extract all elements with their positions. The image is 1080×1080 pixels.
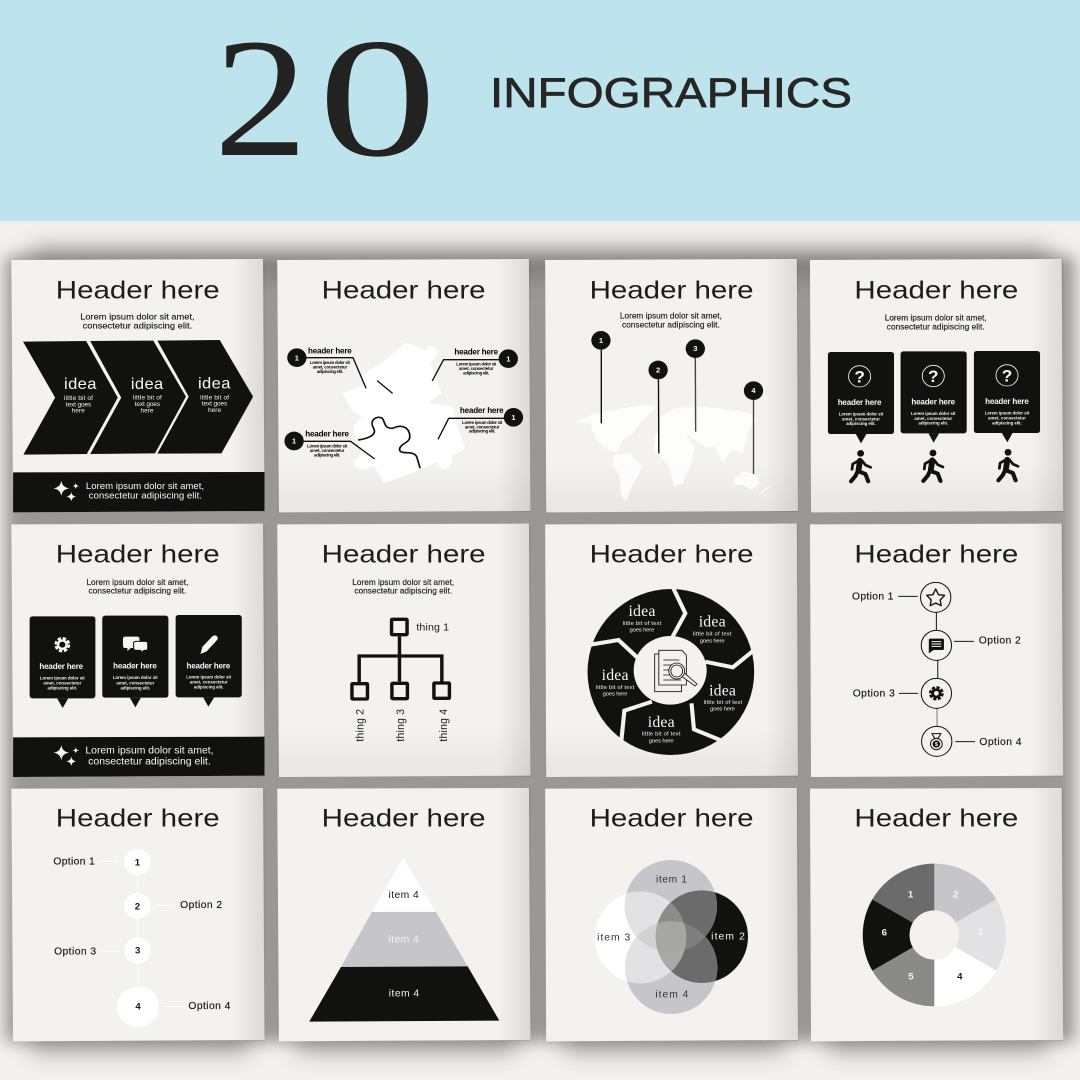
pin 3 (686, 339, 705, 432)
option labels: Option 2 (180, 900, 222, 911)
panel: question boxes (810, 259, 1063, 512)
box 1: header here (838, 398, 882, 407)
heading: Header here (590, 277, 754, 304)
box: chat (102, 616, 168, 707)
box: chat: header here (113, 662, 157, 671)
heading: Header here (854, 541, 1018, 568)
pin 2 (648, 361, 668, 453)
panel: world map pins (545, 259, 798, 512)
tree labels: thing 3 (395, 709, 407, 742)
callout top right: adipiscing elit. (463, 370, 489, 375)
option labels (53, 856, 231, 1012)
donut labels: 6 (882, 927, 887, 938)
tree diagram (352, 619, 449, 699)
donut labels (882, 890, 983, 982)
top banner (0, 0, 1080, 221)
node 4 (117, 986, 159, 1027)
icon: sparkles (53, 745, 79, 766)
title: infographics: INFOGRAPHICS (490, 69, 852, 116)
footer text: Lorem ipsum dolor sit amet, (85, 746, 214, 757)
subtitle: consectetur adipiscing elit. (354, 586, 452, 596)
wheel labels: idea (699, 614, 726, 631)
heading: Header here (854, 277, 1018, 304)
footer text: consectetur adipiscing elit. (88, 757, 211, 768)
footer bar (13, 737, 264, 777)
footer text: Lorem ipsum dolor sit amet, (86, 481, 204, 491)
callout bottom left: Lorem ipsum dolor sit (307, 444, 348, 449)
subtitle: Lorem ipsum dolor sit amet, (352, 577, 454, 587)
callout bottom left: header here (305, 430, 350, 439)
icon: document search (655, 650, 697, 692)
subtitle (885, 313, 987, 331)
wheel labels: little bit of text (623, 621, 662, 627)
option labels: Option 4 (979, 737, 1022, 748)
subtitle: consectetur adipiscing elit. (622, 319, 720, 329)
pyramid bottom tier (309, 966, 499, 1022)
heading: Header here (590, 541, 754, 568)
box 2: amet, consectetur (914, 416, 953, 421)
callout top left: amet, consectetur (313, 365, 347, 370)
subtitle: consectetur adipiscing elit. (83, 320, 192, 330)
puzzle seam (358, 417, 420, 468)
box: settings (30, 616, 95, 708)
donut segments (863, 864, 1006, 1006)
title: 20: 0 (318, 4, 437, 192)
heading: Header here (56, 805, 220, 833)
callout top left: header here (308, 346, 352, 355)
chevron labels: idea (64, 375, 97, 393)
subtitle (352, 577, 454, 596)
wheel labels: goes here (649, 738, 674, 744)
pin 1 (591, 331, 611, 423)
title: 20 (214, 4, 437, 192)
footer text: consectetur adipiscing elit. (89, 491, 202, 501)
wheel labels: little bit of text (642, 732, 681, 738)
heading: Header here (322, 541, 486, 568)
node: chat (921, 630, 952, 660)
heading: Header here (854, 805, 1018, 833)
option labels: Option 2 (979, 635, 1021, 646)
wheel labels: goes here (710, 707, 735, 713)
subtitle: Lorem ipsum dolor sit amet, (885, 313, 987, 323)
subtitle: Lorem ipsum dolor sit amet, (80, 311, 195, 321)
box: pen: header here (186, 661, 231, 670)
subtitle: Lorem ipsum dolor sit amet, (620, 311, 722, 321)
chevron labels (64, 375, 231, 415)
box 2: adipiscing elit. (918, 421, 948, 426)
callout top left: 1 (295, 353, 299, 362)
panel: icon boxes (11, 524, 264, 777)
icon: walker 3 (998, 449, 1018, 480)
node: money bag: $ (935, 742, 938, 748)
venn labels: item 3 (597, 932, 631, 943)
wheel labels: goes here (630, 628, 654, 634)
box 2: Lorem ipsum dolor sit (911, 411, 956, 416)
box: settings: adipiscing elit. (48, 686, 77, 691)
subtitle: consectetur adipiscing elit. (887, 321, 985, 331)
callout bottom right: Lorem ipsum dolor sit (462, 420, 503, 425)
chevron labels: text goes (66, 401, 91, 408)
box 3: amet, consectetur (988, 415, 1026, 420)
venn circles (595, 860, 748, 1014)
chevron labels: idea (131, 375, 164, 393)
box 1 (828, 352, 894, 443)
panel: pyramid (277, 788, 530, 1041)
callout bottom left: 1 (292, 437, 296, 446)
callout top left (287, 346, 393, 393)
donut labels: 4 (957, 971, 963, 982)
heading: Header here (56, 541, 220, 568)
soft outer shadow bands (30, 246, 1050, 1053)
box: settings: header here (39, 662, 84, 671)
panel: numbered timeline (11, 788, 264, 1041)
pyramid middle tier (341, 912, 468, 967)
callout bottom right: 1 (511, 413, 516, 422)
wheel gaps (588, 587, 756, 742)
venn labels: item 2 (711, 932, 745, 943)
box: pen: Lorem ipsum dolor sit (186, 675, 232, 680)
node 2 (124, 893, 151, 919)
box 1: amet, consectetur (842, 416, 880, 421)
chevron labels: here (141, 407, 154, 414)
callout top right: header here (454, 348, 499, 357)
wheel labels: little bit of text (596, 685, 635, 691)
box: settings: amet, consectetur (43, 681, 82, 686)
panel: chevron process (11, 259, 264, 512)
box 1: Lorem ipsum dolor sit (839, 411, 884, 416)
callout top left: adipiscing elit. (317, 369, 343, 374)
callout bottom right: adipiscing elit. (469, 429, 495, 434)
box: pen: adipiscing elit. (194, 685, 224, 690)
title: 20: 2 (214, 4, 307, 192)
box 2 (901, 351, 967, 443)
connectors (898, 596, 975, 742)
callout top right: amet, consectetur (459, 366, 494, 371)
panel: cycle wheel (545, 524, 798, 777)
box 3: header here (985, 397, 1029, 406)
callout bottom right: header here (460, 406, 504, 415)
wheel centre (634, 636, 707, 705)
callout bottom left: amet, consectetur (310, 448, 345, 453)
option labels: Option 1 (53, 856, 95, 867)
callout bottom left (284, 430, 375, 459)
panel: hierarchy (277, 524, 530, 777)
tree labels (354, 621, 450, 742)
chevron labels: idea (198, 375, 231, 392)
option labels: Option 3 (853, 689, 895, 700)
node 1 (124, 849, 151, 875)
node 2: 2 (135, 901, 140, 912)
puzzle pieces (343, 343, 466, 483)
donut labels: 5 (908, 971, 914, 982)
subtitle (620, 311, 722, 329)
pin 4: 4 (751, 386, 756, 395)
pyramid top tier (372, 858, 436, 912)
box 3: adipiscing elit. (992, 420, 1022, 425)
subtitle (80, 311, 195, 330)
chevron labels: text goes (135, 401, 160, 408)
box 3: Lorem ipsum dolor sit (985, 411, 1030, 416)
pyramid bottom tier: item 4 (389, 989, 419, 1000)
tree labels: thing 2 (354, 709, 366, 742)
panel: puzzle (277, 259, 530, 512)
pin 1: 1 (599, 336, 603, 345)
node: star (921, 582, 951, 612)
wheel labels: idea (602, 667, 629, 684)
node: money bag (922, 726, 952, 756)
node 3 (124, 938, 151, 964)
pyramid top tier: item 4 (388, 890, 419, 901)
node: gear (921, 678, 952, 708)
option labels: Option 3 (54, 946, 96, 957)
chevron labels: little bit of (200, 394, 229, 401)
box 1: ? (854, 368, 865, 386)
donut labels: 1 (908, 890, 913, 901)
subtitle: Lorem ipsum dolor sit amet, (86, 577, 188, 587)
panel: donut chart (810, 788, 1063, 1041)
node 3: 3 (135, 946, 140, 957)
icon: walker 2 (923, 450, 943, 481)
wheel labels: goes here (700, 638, 725, 644)
box 2: header here (911, 398, 956, 407)
box: pen (176, 615, 242, 707)
box: chat: amet, consectetur (116, 680, 155, 685)
callout top right: Lorem ipsum dolor sit (456, 361, 497, 366)
box: settings: Lorem ipsum dolor sit (40, 676, 85, 681)
callout bottom right: amet, consectetur (465, 424, 500, 429)
pin 3: 3 (693, 344, 697, 353)
wheel labels: goes here (603, 692, 627, 698)
donut labels: 3 (978, 927, 983, 938)
node 1: 1 (135, 857, 140, 868)
node 4: 4 (135, 1002, 142, 1013)
icon: walker 1 (851, 450, 871, 481)
venn labels: item 4 (655, 989, 689, 1000)
venn labels: item 1 (656, 875, 687, 886)
heading: Header here (56, 277, 220, 304)
panel: icon timeline (810, 524, 1063, 777)
donut labels: 2 (953, 890, 958, 901)
box 1: adipiscing elit. (846, 421, 876, 426)
footer text (86, 481, 204, 501)
callout top right (432, 348, 518, 381)
footer bar (13, 472, 264, 512)
box: pen: amet, consectetur (190, 679, 228, 684)
heading: Header here (322, 277, 486, 304)
icon: sparkles (53, 481, 79, 501)
box: chat: adipiscing elit. (121, 685, 150, 690)
callout top left: Lorem ipsum dolor sit (310, 360, 350, 365)
chevron labels: here (208, 407, 222, 414)
option labels: Option 4 (188, 1001, 231, 1012)
box 3: ? (1002, 367, 1012, 385)
pin 2: 2 (656, 365, 660, 374)
pin 4 (744, 381, 763, 474)
heading: Header here (322, 805, 486, 833)
connectors (99, 861, 184, 1007)
wheel labels: idea (648, 714, 675, 731)
subtitle (86, 577, 188, 596)
wheel labels: little bit of text (704, 700, 743, 706)
wheel labels: idea (629, 603, 655, 620)
wheel labels (596, 603, 743, 744)
callout bottom right (438, 406, 523, 439)
box 2: ? (928, 367, 939, 386)
option labels (852, 592, 1022, 748)
option labels: Option 1 (852, 592, 894, 603)
chevrons (23, 340, 253, 455)
subtitle: consectetur adipiscing elit. (89, 586, 186, 596)
box 3 (974, 351, 1040, 442)
tree labels: thing 1 (416, 621, 449, 633)
venn labels (597, 875, 745, 1000)
chevron labels: here (72, 408, 85, 415)
box: chat: Lorem ipsum dolor sit (113, 675, 158, 680)
world map (574, 405, 769, 502)
chevron labels: text goes (202, 401, 227, 408)
chevron labels: little bit of (133, 395, 162, 402)
wheel labels: idea (709, 683, 736, 699)
heading: Header here (590, 805, 754, 833)
pyramid middle tier: item 4 (388, 934, 419, 945)
footer text (85, 746, 214, 768)
callout top right: 1 (506, 354, 510, 363)
chevron labels: little bit of (64, 395, 93, 402)
panel: venn diagram (545, 788, 798, 1041)
callout bottom left: adipiscing elit. (314, 453, 340, 458)
card drop shadows (5, 256, 1075, 1042)
wheel (588, 589, 754, 755)
tree labels: thing 4 (438, 709, 450, 742)
wheel labels: little bit of text (693, 632, 732, 638)
